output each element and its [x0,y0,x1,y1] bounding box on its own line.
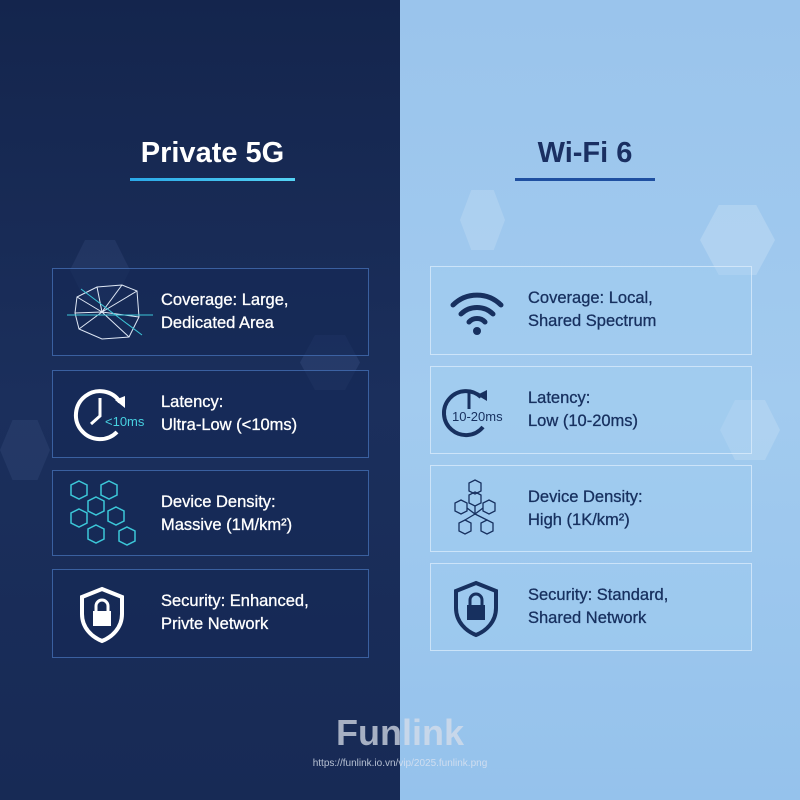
text: security: Shared Network [528,609,646,627]
text: latency: Ultra-Low (<10ms) [161,416,297,434]
text: density: Device Density: [528,488,643,506]
icon: clock: 10-20ms [452,409,503,424]
text: security [161,592,309,633]
text: coverage: Dedicated Area [161,314,274,332]
text: density: Device Density: [161,493,276,511]
card: security [52,569,369,658]
icon: hex devices [70,480,136,546]
text: latency: Latency: [161,393,223,411]
card: density [52,470,369,556]
text: latency [528,389,638,430]
text: security: Security: Enhanced, [161,592,309,610]
watermark logo: Funlink [336,712,464,753]
text: latency: Low (10-20ms) [528,412,638,430]
text: security: Security: Standard, [528,586,668,604]
text: security: Privte Network [161,615,268,633]
text: security [528,586,668,627]
text: density [528,488,643,529]
icon: shield [454,580,498,638]
text: coverage [528,289,656,330]
icon: network map [67,284,153,340]
text: density [161,493,292,534]
text: latency [161,393,297,434]
title: Private 5G: Private 5G [141,137,284,169]
title underline [130,178,295,181]
icon: clock: <10ms [105,414,145,429]
left panel [0,0,400,800]
icon: wifi [450,292,504,335]
title underline [515,178,655,181]
card: density [430,465,752,552]
icon: clock [74,389,145,442]
card: latency [430,366,752,454]
icon: shield [80,586,124,644]
text: density: Massive (1M/km²) [161,516,292,534]
title: Wi-Fi 6: Wi-Fi 6 [538,137,632,169]
text: coverage: Shared Spectrum [528,312,656,330]
text: density: High (1K/km²) [528,511,630,529]
text: coverage [161,291,288,332]
card: latency [52,370,369,458]
right panel [400,0,800,800]
text: coverage: Coverage: Large, [161,291,288,309]
icon: hex network [454,479,496,535]
text: coverage: Coverage: Local, [528,289,653,307]
watermark url: https://funlink.io.vn/vip/2025.funlink.png [313,758,487,769]
icon: clock [442,389,503,438]
card: coverage [52,268,369,356]
card: security [430,563,752,651]
text: latency: Latency: [528,389,590,407]
card: coverage [430,266,752,355]
